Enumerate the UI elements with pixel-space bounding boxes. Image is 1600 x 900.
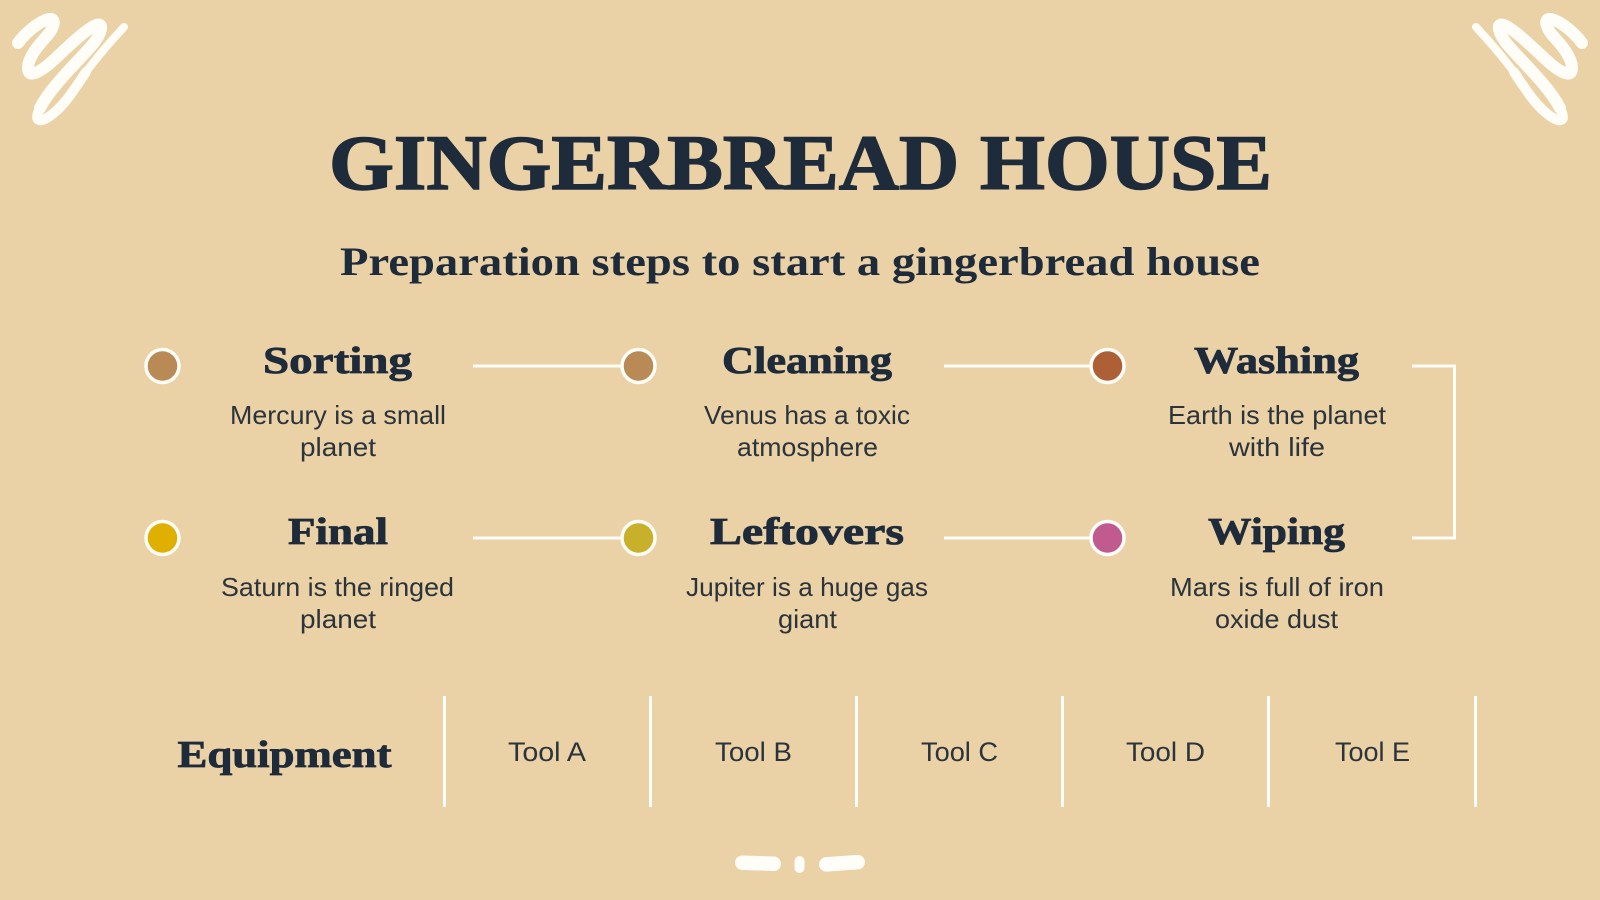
step: Sorting: Mercury is a small <box>230 400 446 430</box>
step: Cleaning <box>622 340 910 462</box>
step: Final: Saturn is the ringed <box>221 572 454 602</box>
step: Final <box>146 511 454 634</box>
tool labels: Tool B <box>715 737 792 767</box>
equipment dividers <box>444 696 1476 807</box>
step: Leftovers: giant <box>778 604 838 634</box>
equipment heading: Equipment <box>178 734 392 776</box>
scribble: top left <box>18 19 124 120</box>
step: Washing: Earth is the planet <box>1168 400 1387 430</box>
tool labels: Tool A <box>508 737 586 767</box>
tool labels: Tool E <box>1335 737 1410 767</box>
equipment row <box>178 696 1476 807</box>
tool labels: Tool D <box>1126 737 1205 767</box>
step: Sorting: Sorting <box>263 340 412 382</box>
step: Washing: with life <box>1228 432 1325 462</box>
step: Washing: Washing <box>1194 340 1359 382</box>
step: Wiping: Mars is full of iron <box>1170 572 1384 602</box>
step: Wiping <box>1091 511 1384 634</box>
step: Leftovers: Leftovers <box>710 511 904 553</box>
tool labels: Tool C <box>921 737 998 767</box>
step: Wiping: Wiping <box>1208 511 1345 553</box>
step: Wiping: oxide dust <box>1215 604 1339 634</box>
step: Washing <box>1091 340 1387 462</box>
step: Sorting <box>146 340 446 462</box>
step: Leftovers: Jupiter is a huge gas <box>686 572 928 602</box>
step: Sorting: planet <box>300 432 377 462</box>
tool labels <box>508 737 1410 767</box>
step: Cleaning: atmosphere <box>737 432 878 462</box>
connector lines between steps <box>473 366 1454 538</box>
step: Cleaning: Venus has a toxic <box>704 400 910 430</box>
step: Cleaning: Cleaning <box>722 340 892 382</box>
footer decoration <box>735 854 865 873</box>
step: Final: planet <box>300 604 377 634</box>
step: Final: Final <box>288 511 388 553</box>
step: Leftovers <box>622 511 928 634</box>
subtitle: Preparation steps to start a gingerbread house <box>340 239 1260 284</box>
scribble: top right <box>1476 19 1582 120</box>
title: GINGERBREAD HOUSE <box>329 119 1272 206</box>
